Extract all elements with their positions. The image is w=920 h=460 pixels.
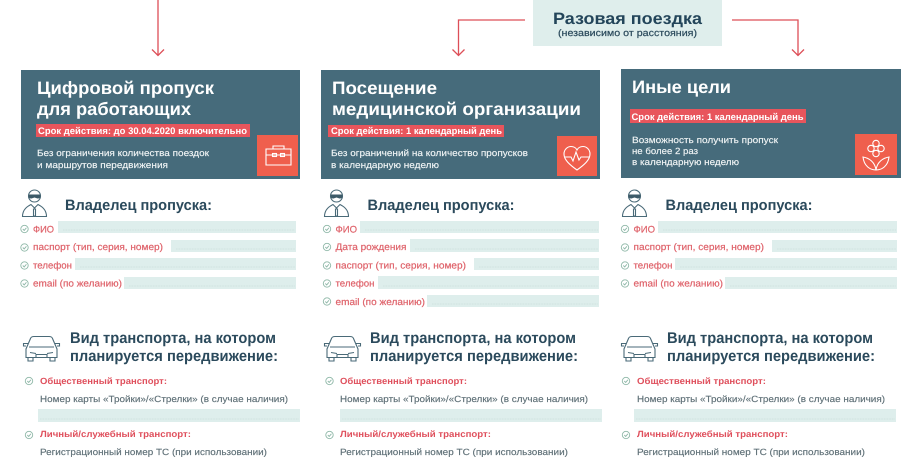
arrow: to digital pass panel: [152, 0, 164, 56]
panel: medical organisation visit: Срок действия: 1 календарный день: [331, 126, 502, 137]
transport options: [326, 376, 602, 457]
panel: other purposes: Срок действия: 1 календарный день: [632, 112, 804, 123]
section: pass owner, column 2: [323, 190, 599, 308]
owner field rows: паспорт (тип, серия, номер): [634, 242, 764, 253]
transport options: Номер карты «Тройки»/«Стрелки» (в случае наличия): [40, 394, 288, 404]
owner field rows: ФИО: [33, 224, 54, 236]
transport options: [25, 376, 300, 457]
transport options: Общественный транспорт:: [340, 376, 467, 386]
section: transport, column 1: планируется передвижение:: [70, 348, 278, 365]
one-time trip heading box: (независимо от расстояния): [558, 28, 697, 39]
section: transport, column 3: Вид транспорта, на котором: [667, 330, 873, 347]
panel: digital pass for workers: Цифровой пропуск: [37, 78, 215, 98]
section: pass owner, column 2: Владелец пропуска:: [368, 197, 514, 214]
icon: person: [22, 190, 46, 216]
panel: other purposes: Иные цели: [632, 77, 731, 97]
section: transport, column 3: [622, 330, 896, 457]
panel: medical organisation visit: медицинской организации: [332, 99, 581, 119]
owner field rows: email (по желанию): [336, 297, 425, 308]
transport options: Номер карты «Тройки»/«Стрелки» (в случае наличия): [637, 394, 885, 404]
panel: medical organisation visit: [321, 70, 600, 179]
panel: other purposes: Возможность получить пропуск: [632, 135, 778, 145]
section: pass owner, column 1: Владелец пропуска:: [65, 197, 212, 214]
panel: medical organisation visit: Посещение: [332, 78, 437, 98]
owner field rows: [323, 221, 599, 308]
owner field rows: телефон: [33, 260, 72, 272]
transport options: [622, 376, 896, 457]
icon: briefcase: [257, 135, 298, 176]
panel: digital pass for workers: и маршрутов передвижения: [37, 160, 168, 170]
section: transport, column 2: Вид транспорта, на котором: [370, 330, 576, 347]
transport options: Регистрационный номер ТС (при использовании): [340, 447, 568, 457]
section: transport, column 1: Вид транспорта, на котором: [70, 330, 276, 347]
owner field rows: ФИО: [634, 224, 655, 236]
transport options: Общественный транспорт:: [40, 376, 167, 386]
transport options: Личный/служебный транспорт:: [40, 429, 191, 439]
panel: digital pass for workers: Без ограничения количества поездок: [37, 148, 209, 158]
owner field rows: телефон: [336, 278, 374, 290]
transport options: Общественный транспорт:: [637, 376, 766, 386]
icon: car: [24, 336, 60, 361]
icon: person: [324, 190, 348, 216]
icon: car: [622, 336, 658, 361]
section: transport, column 2: планируется передвижение:: [370, 348, 578, 365]
owner field rows: email (по желанию): [33, 278, 122, 290]
panel: other purposes: [621, 69, 901, 178]
panel: digital pass for workers: для работающих: [37, 99, 191, 119]
transport options: Личный/служебный транспорт:: [637, 429, 788, 439]
one-time trip heading box: Разовая поездка: [553, 10, 703, 28]
owner field rows: [621, 221, 897, 290]
panel: medical organisation visit: Без ограничений на количество пропусков: [331, 148, 528, 158]
section: transport, column 2: [324, 330, 602, 457]
owner field rows: телефон: [634, 260, 672, 272]
section: pass owner, column 1: [21, 190, 296, 290]
panel: digital pass for workers: Срок действия: до 30.04.2020 включительно: [38, 126, 247, 137]
panel: other purposes: в календарную неделю: [632, 157, 739, 167]
owner field rows: паспорт (тип, серия, номер): [33, 242, 163, 253]
icon: car: [324, 336, 360, 361]
transport options: Личный/служебный транспорт:: [340, 429, 491, 439]
section: pass owner, column 3: [621, 190, 897, 290]
arrow: to medical visit panel: [452, 20, 525, 56]
transport options: Регистрационный номер ТС (при использовании): [40, 447, 267, 457]
icon: heart with pulse: [557, 136, 597, 176]
owner field rows: Дата рождения: [336, 242, 406, 253]
transport options: Номер карты «Тройки»/«Стрелки» (в случае наличия): [340, 394, 588, 404]
icon: flower: [855, 134, 897, 175]
section: transport, column 1: [24, 330, 300, 457]
owner field rows: email (по желанию): [634, 278, 723, 290]
owner field rows: ФИО: [336, 224, 357, 236]
arrow: to other purposes panel: [732, 20, 804, 56]
icon: person: [622, 190, 646, 216]
one-time trip heading box: [533, 0, 722, 46]
section: pass owner, column 3: Владелец пропуска:: [666, 197, 812, 214]
owner field rows: [21, 221, 296, 290]
panel: digital pass for workers: [21, 70, 300, 179]
owner field rows: паспорт (тип, серия, номер): [336, 260, 466, 272]
panel: medical organisation visit: в календарную неделю: [331, 160, 439, 170]
panel: other purposes: не более 2 раз: [632, 146, 698, 156]
section: transport, column 3: планируется передвижение:: [667, 348, 875, 365]
transport options: Регистрационный номер ТС (при использовании): [637, 447, 865, 457]
